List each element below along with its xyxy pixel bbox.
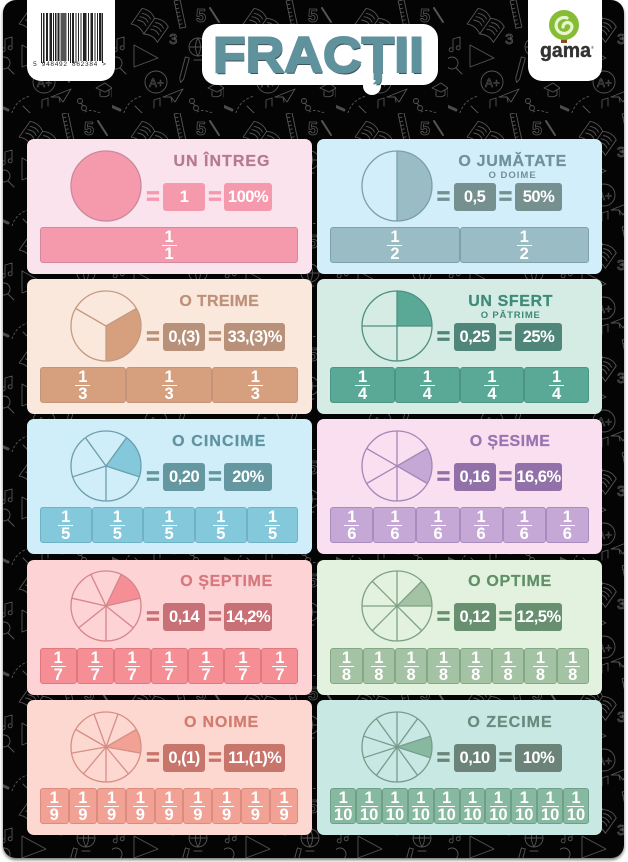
fraction bar: 7 [275,666,284,684]
pie chart [70,290,142,362]
logo: gama [540,10,594,62]
fraction bar: 10 [334,806,352,824]
fraction bar: 1 [390,789,400,807]
fraction bar: 1 [407,649,416,667]
fraction bar: 10 [412,806,430,824]
pie chart [361,290,433,362]
fraction bar: 1 [374,649,383,667]
fraction bar: 1 [78,789,87,807]
fraction bar: 1 [279,789,289,807]
fraction bar [40,507,298,543]
equals: = [208,322,222,348]
fraction bar: 5 [164,525,174,543]
subheading: O PĂTRIME [481,310,541,320]
pie chart [361,430,433,502]
fraction bar [330,507,589,543]
fraction bar: 8 [342,666,351,684]
fraction bar: 4 [358,385,367,403]
percent: 11,(1)% [228,749,281,767]
fraction bar: 10 [567,806,585,824]
fraction bar: 1 [536,649,545,667]
fraction bar: 1 [164,649,174,667]
fraction bar: 1 [54,649,63,667]
fraction bar: 1 [358,368,367,386]
fraction bar: 1 [339,789,348,807]
heading: UN ÎNTREG [174,152,270,170]
percent: 25% [523,328,554,346]
fraction bar: 1 [268,508,277,526]
percent [515,744,562,772]
fraction bar: 6 [477,525,486,543]
fraction bar: 1 [50,789,59,807]
percent: 14,2% [226,608,270,626]
fraction bar: 1 [504,649,513,667]
equals: = [208,182,222,208]
fraction bar: 9 [107,806,116,824]
fraction bar: 1 [164,245,174,263]
percent: 50% [523,188,554,206]
equals: = [437,322,450,348]
fraction bar: 6 [347,525,356,543]
pie chart [361,150,433,222]
fraction bar: 1 [251,789,260,807]
fraction bar: 7 [164,666,174,684]
fraction bar [40,367,298,403]
heading: O TREIME [179,292,259,310]
fraction bar: 6 [563,525,572,543]
panel: o sesime [317,419,602,554]
fraction bar: 1 [520,789,529,807]
percent [224,183,272,211]
decimal [163,323,205,351]
panel: o cincime [26,419,312,554]
percent [515,183,562,211]
fraction bar: 1 [164,508,174,526]
fraction bar: 1 [275,649,284,667]
fraction bar: 6 [520,525,529,543]
percent: 100% [228,188,268,206]
fraction bar: 8 [439,666,448,684]
fraction bar: 8 [407,666,416,684]
fraction bar: 1 [390,228,400,246]
fraction bar: 4 [487,385,497,403]
percent: 20% [232,468,264,486]
equals: = [146,322,160,348]
equals: = [437,744,450,770]
decimal [163,183,205,211]
fraction bar: 1 [494,789,503,807]
equals: = [437,603,450,629]
panel: o treime [26,279,312,414]
fraction bar: 1 [487,368,497,386]
fraction bar: 1 [568,649,577,667]
fraction bar: 5 [61,525,70,543]
title: FRACȚII [213,27,424,83]
equals: = [499,462,512,488]
decimal: 0,10 [460,749,490,767]
decimal [163,744,205,772]
panel: o zecime [317,700,602,835]
subheading: O DOIME [488,170,537,180]
fraction bar: 7 [91,666,100,684]
logo tab [528,0,602,81]
fraction bar: 1 [128,649,137,667]
decimal: 0,25 [460,328,490,346]
fraction bar: 1 [468,789,477,807]
heading: O ZECIME [467,714,553,730]
fraction bar: 1 [251,368,260,386]
fraction bar: 1 [164,789,174,807]
fraction bar: 9 [164,806,174,824]
equals: = [146,462,160,488]
fraction bar: 5 [113,525,122,543]
percent [515,323,562,351]
percent: 12,5% [516,608,561,626]
fraction bar: 1 [433,508,443,526]
fraction bar: 1 [222,789,231,807]
fraction bar: 10 [437,806,456,824]
fraction bar: 7 [54,666,63,684]
fraction bar: 9 [279,806,289,824]
panel: o jumatate [317,139,602,274]
pie chart [70,430,142,502]
pie chart [70,711,142,783]
fraction bar: 8 [374,666,383,684]
fraction bar: 5 [268,525,277,543]
panel: o noime [26,700,312,835]
pie chart [361,570,433,642]
percent [224,603,272,631]
fraction bar [330,648,589,684]
logo: gama: ® [591,45,594,50]
fraction bar: 1 [552,368,561,386]
fraction bar: 1 [107,789,116,807]
percent [515,463,562,491]
percent [515,603,562,631]
percent: 16,6% [516,468,561,486]
equals: = [208,603,222,629]
logo: gama: gama [540,40,592,62]
decimal [454,183,496,211]
equals: = [437,182,450,208]
fraction bar: 10 [463,806,482,824]
fraction bar: 1 [238,649,248,667]
equals: = [499,322,512,348]
fraction bar: 7 [128,666,137,684]
fraction bar: 10 [541,806,559,824]
fraction bar: 9 [136,806,145,824]
fraction bar: 7 [201,666,211,684]
percent [224,463,272,491]
equals: = [437,462,450,488]
pie chart [361,711,433,783]
equals: = [208,462,222,488]
fraction bar: 2 [390,245,400,263]
fraction bar: 8 [504,666,513,684]
decimal: 0,14 [169,608,199,626]
percent: 33,(3)% [228,328,282,346]
decimal [163,603,205,631]
equals: = [499,603,512,629]
heading: O OPTIME [468,573,552,590]
fraction bar [40,788,298,824]
fraction bar: 9 [78,806,87,824]
fraction bar: 10 [386,806,404,824]
fraction bar: 1 [201,649,211,667]
fraction bar: 3 [251,385,260,403]
fraction bar: 1 [113,508,122,526]
fraction bar: 2 [520,245,529,263]
fraction bar: 1 [364,789,374,807]
fraction bar: 3 [164,385,174,403]
decimal: 0,(1) [168,749,200,767]
fraction bar: 4 [552,385,561,403]
equals: = [146,182,160,208]
decimal [454,603,496,631]
fraction bar: 1 [416,789,425,807]
decimal: 0,16 [460,468,490,486]
fraction bar: 1 [442,789,451,807]
fraction bar: 1 [342,649,351,667]
equals: = [499,182,512,208]
fraction bar: 1 [520,508,529,526]
decimal: 1 [180,188,188,206]
fraction bar: 10 [515,806,533,824]
panel: un sfert [317,279,602,414]
fraction bar: 9 [222,806,231,824]
fraction bar: 1 [423,368,432,386]
barcode: 5 948492 862384 > [33,61,106,68]
fraction bar: 1 [164,228,174,246]
pie chart [70,570,142,642]
fraction bar: 8 [568,666,577,684]
fraction bar: 10 [489,806,508,824]
fraction bar: 7 [238,666,248,684]
fraction bar: 9 [50,806,59,824]
fraction bar [330,367,589,403]
fraction bar: 1 [216,508,225,526]
pie chart [70,150,142,222]
decimal: 0,(3) [168,328,200,346]
fraction bar: 6 [433,525,443,543]
fraction bar [40,227,298,263]
heading: O ȘESIME [470,432,550,450]
heading: O CINCIME [172,432,266,450]
equals: = [146,744,160,770]
panel: o septime [26,560,312,694]
barcode tab [27,0,115,81]
fraction bar: 1 [439,649,448,667]
percent [224,744,285,772]
fraction bar: 1 [571,789,581,807]
fraction bar: 1 [91,649,100,667]
barcode [33,13,106,68]
decimal: 0,12 [460,608,490,626]
heading: O JUMĂTATE [458,152,567,170]
fraction bar: 9 [193,806,202,824]
decimal [454,744,496,772]
fraction bar: 1 [471,649,480,667]
fraction bar: 1 [520,228,529,246]
fraction bar: 1 [390,508,400,526]
fraction bar: 8 [536,666,545,684]
fraction bar [40,648,298,684]
heading: O NOIME [184,714,259,730]
fraction bar: 3 [78,385,87,403]
panel: un intreg [26,139,312,274]
fraction bar: 5 [216,525,225,543]
equals: = [208,744,222,770]
fraction bar: 1 [347,508,356,526]
fraction bar: 1 [164,368,174,386]
decimal [454,463,496,491]
heading: UN SFERT [468,292,553,310]
percent: 10% [523,749,554,767]
equals: = [499,744,512,770]
fraction bar: 1 [61,508,70,526]
fraction bar: 1 [193,789,202,807]
fraction bar [330,227,589,263]
fraction bar [330,788,589,824]
fraction bar: 1 [546,789,555,807]
fraction bar: 1 [136,789,145,807]
decimal: 0,20 [169,468,199,486]
fraction bar: 1 [78,368,87,386]
fraction bar: 8 [471,666,480,684]
equals: = [146,603,160,629]
decimal: 0,5 [464,188,485,206]
fraction bar: 6 [390,525,400,543]
decimal [163,463,205,491]
decimal [454,323,496,351]
fraction bar: 9 [251,806,260,824]
heading: O ȘEPTIME [180,573,273,590]
panel: o optime [317,560,602,694]
percent [224,323,285,351]
fraction bar: 1 [477,508,486,526]
fraction bar: 1 [563,508,572,526]
fraction bar: 10 [360,806,378,824]
fraction bar: 4 [423,385,432,403]
